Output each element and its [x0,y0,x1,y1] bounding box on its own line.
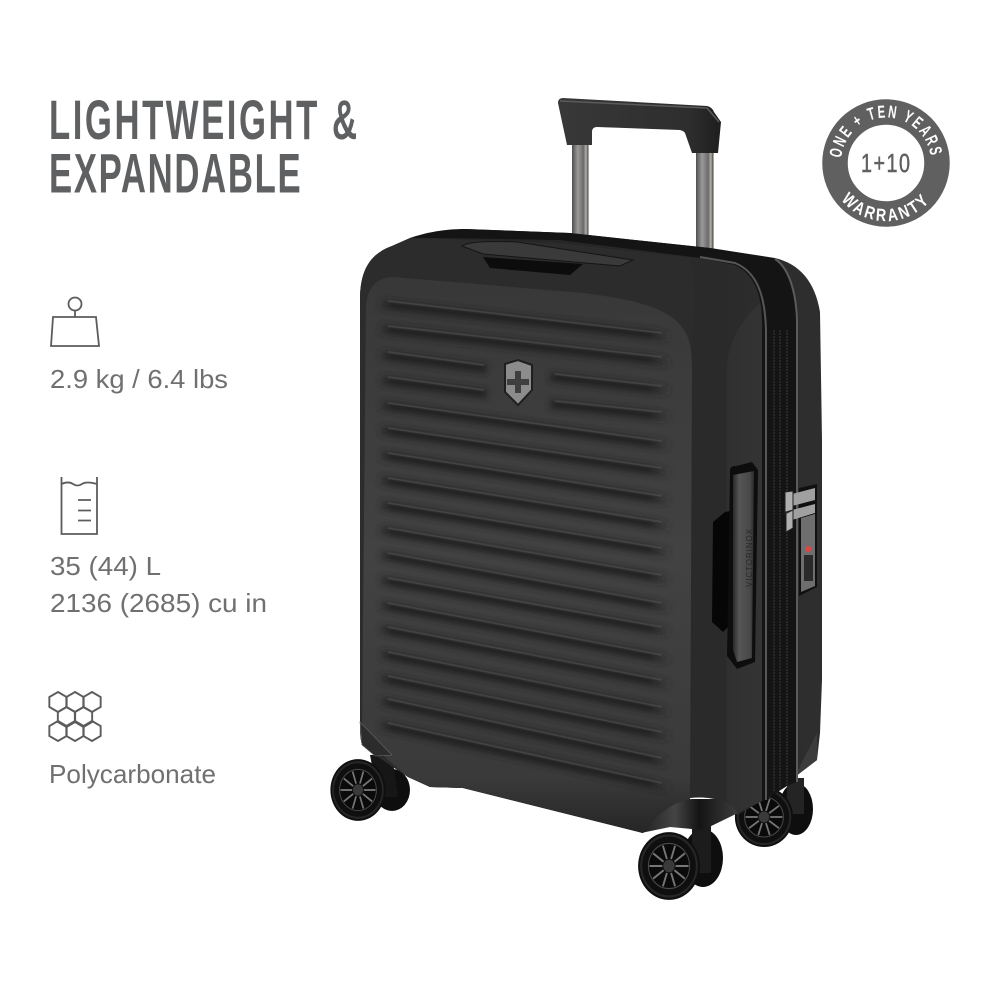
weight value: 2.9 kg / 6.4 lbs [50,364,228,394]
title: LIGHTWEIGHT & [49,89,357,151]
corner guard bottom [641,799,738,833]
icon: honeycomb [49,692,101,741]
material value: Polycarbonate [49,759,216,789]
spec: volume [50,477,267,618]
volume value: 35 (44) L [50,551,161,581]
brand on handle: VICTORINOX [745,528,754,587]
ribs [380,301,670,788]
telescopic poles [572,140,714,250]
recessed rib panel [362,277,692,833]
front wheels [330,759,700,900]
side recess [727,300,764,812]
shell [360,229,822,833]
volume value [50,551,267,618]
spec: weight [50,298,228,394]
badge warranty label: WARRANTY [842,192,926,222]
trolley handle [558,98,721,153]
zipper band [410,229,797,802]
volume value: 2136 (2685) cu in [50,588,267,618]
corner guard left [360,722,392,756]
side handle [712,462,758,669]
badge top text: ONE + TEN YEARS [830,106,942,157]
title: EXPANDABLE [49,142,301,205]
shield logo [505,360,532,405]
suitcase [330,98,822,900]
TSA lock [785,484,817,596]
spec: material [49,692,216,789]
back wheels and forks [370,755,813,887]
warranty badge [822,99,950,227]
icon: weight [51,298,99,346]
top carry handle [462,242,633,275]
badge center text: 1+10 [861,148,910,178]
front face [360,238,695,833]
title [49,89,357,205]
icon: beaker [62,477,97,534]
corner guard right [787,733,817,783]
